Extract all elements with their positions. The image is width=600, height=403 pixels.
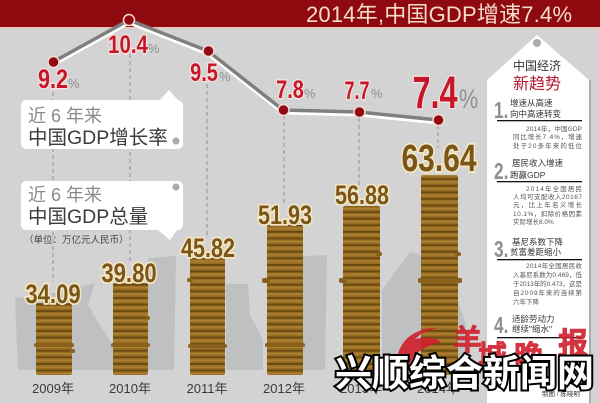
item 1: 同比增长7.4%，增速 <box>513 132 582 141</box>
year labels: 2009年 <box>32 381 74 396</box>
year labels: 2014年 <box>417 381 459 396</box>
growth rate labels: 7.7 <box>344 76 370 105</box>
GDP value labels <box>25 138 477 310</box>
growth rate labels: % <box>148 41 160 56</box>
growth rate labels: 7.8 <box>276 76 304 104</box>
unit note: （单位：万亿元人民币） <box>24 234 129 246</box>
item 1: 向中高速转变 <box>510 109 562 119</box>
growth rate labels: 9.5 <box>190 59 218 87</box>
title: 2014年,中国GDP增速7.4% <box>306 2 572 27</box>
callout: growth rate: 近 6 年来 <box>28 106 102 126</box>
growth rate labels: 9.2 <box>38 65 68 95</box>
watermark: newspaper logo: 晚 <box>514 340 543 373</box>
item 2: 跑赢GDP <box>510 170 546 180</box>
growth rate labels: % <box>459 85 478 115</box>
silhouettes behind stacks <box>15 252 466 370</box>
growth rate labels: % <box>68 76 80 91</box>
item 4: 适龄劳动力 <box>512 314 555 324</box>
year labels: 2011年 <box>187 381 227 396</box>
item 2: 实际增长8.0% <box>513 217 554 226</box>
GDP value labels: 56.88 <box>335 181 389 211</box>
item 2 <box>494 158 582 226</box>
coin stacks <box>34 175 462 375</box>
item 1: 增速从高速 <box>510 98 553 108</box>
item 4: 4. <box>494 314 508 339</box>
growth rate labels: % <box>371 86 383 101</box>
GDP value labels: 51.93 <box>258 201 312 231</box>
item 3: 3. <box>494 238 508 263</box>
item 1: 处于20多年来的低位 <box>513 141 582 150</box>
growth rate labels: 10.4 <box>108 30 148 58</box>
item 2: 居民收入增速 <box>512 158 564 168</box>
stack 2014 <box>418 175 462 375</box>
credit: 制图 / 陈晓明 <box>542 389 580 398</box>
year labels: 2013年 <box>340 381 382 396</box>
item 4 <box>494 314 582 339</box>
item 3: 六年下降 <box>513 297 540 306</box>
header band <box>0 0 600 28</box>
item 3 <box>494 237 582 306</box>
item 2: 人均可支配收入20167 <box>513 192 582 201</box>
item 2: 元，比上年名义增长 <box>513 200 582 209</box>
panel: tag with trends <box>487 35 591 403</box>
item 3: 基尼系数下降 <box>512 237 564 247</box>
item 3: 贫富差距缩小 <box>510 247 562 257</box>
stack 2013 <box>339 206 382 375</box>
item 1 <box>494 98 582 150</box>
callout: total GDP: 中国GDP总量 <box>28 206 148 228</box>
stack 2010 <box>111 283 150 375</box>
stack 2009 <box>34 303 75 375</box>
stack 2011 <box>187 258 227 375</box>
callout: total GDP <box>21 181 183 246</box>
item 3: 于2013年的0.473，这是 <box>513 279 582 288</box>
watermark: newspaper logo: 报 <box>558 328 588 361</box>
growth rate labels <box>38 30 478 118</box>
watermark: newspaper logo: 羊 <box>453 324 482 357</box>
item 1: 1. <box>494 99 508 124</box>
tag heading: 中国经济 <box>513 58 561 73</box>
item 3: 自2009年来的连续第 <box>513 288 582 297</box>
dashed drop lines <box>53 54 438 282</box>
growth rate labels: % <box>219 69 231 84</box>
item 3: 入基尼系数为0.469，低 <box>513 270 582 279</box>
stack 2012 <box>262 225 305 375</box>
item 2: 10.1%，扣除价格因素 <box>513 209 582 218</box>
item 2: 2. <box>494 160 508 185</box>
item 1: 2014年，中国GDP <box>526 124 582 133</box>
item 2: 2014年全国居民 <box>526 184 582 193</box>
line chart: GDP growth rate <box>48 14 444 126</box>
item 3: 2014年全国居民收 <box>526 261 582 270</box>
watermark: newspaper logo <box>398 324 588 373</box>
item 4: 继续"缩水" <box>512 324 552 334</box>
GDP value labels: 39.80 <box>101 259 157 289</box>
growth rate labels: % <box>304 86 316 101</box>
watermark: newspaper logo: 城 <box>478 340 507 373</box>
year labels: 2012年 <box>263 381 305 396</box>
GDP value labels: 45.82 <box>181 234 235 264</box>
year labels <box>32 381 459 396</box>
watermark: site name: 兴顺综合新闻网 <box>335 343 594 397</box>
callout: total GDP: 近 6 年来 <box>28 185 102 205</box>
panel: tag with trends: 新趋势 <box>513 75 561 93</box>
GDP value labels: 63.64 <box>401 138 477 180</box>
GDP value labels: 34.09 <box>25 280 81 310</box>
growth rate labels: 7.4 <box>412 69 458 118</box>
callout: growth rate: 中国GDP增长率 <box>28 127 168 149</box>
callout: growth rate <box>21 90 183 149</box>
year labels: 2010年 <box>109 381 151 396</box>
